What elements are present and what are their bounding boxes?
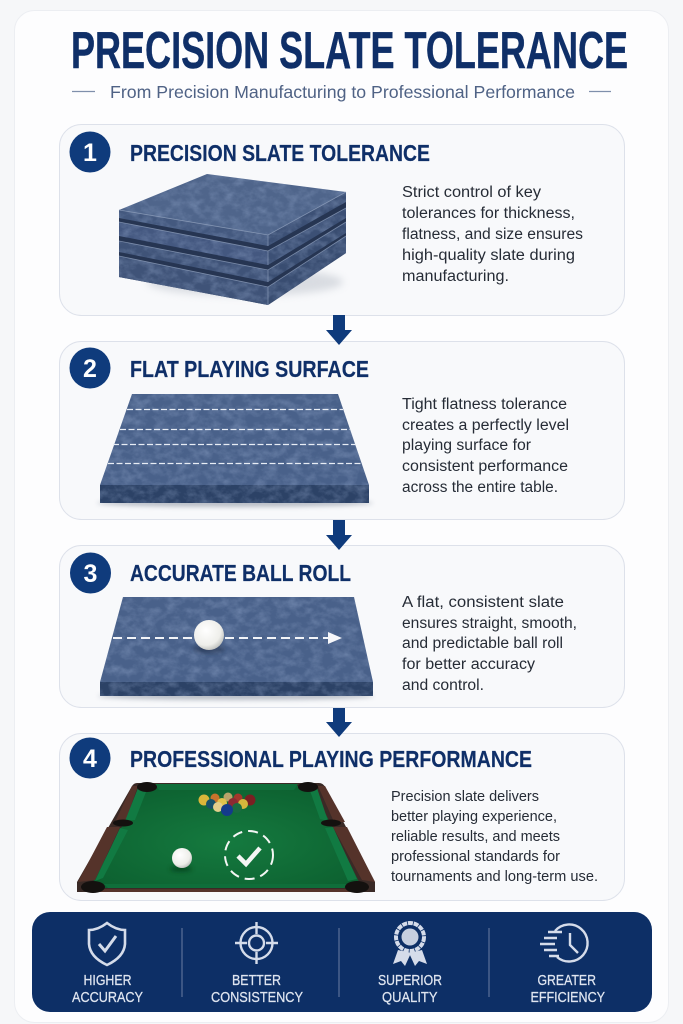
step 4 heading: PROFESSIONAL PLAYING PERFORMANCE	[130, 746, 532, 772]
step 1 illustration: stacked slate slabs	[119, 174, 346, 305]
panel: step 1	[60, 124, 624, 316]
step 4 description: better playing experience,	[391, 809, 557, 825]
step 4 description: professional standards for	[391, 849, 560, 865]
pockets	[81, 782, 369, 893]
step 1 description: flatness, and size ensures	[402, 226, 583, 243]
icon: target	[235, 922, 278, 964]
cue ball	[170, 866, 192, 872]
step 2 description: Tight flatness tolerance	[402, 396, 567, 413]
step 3 heading: ACCURATE BALL ROLL	[130, 560, 351, 586]
table frame	[77, 783, 375, 892]
benefit: superior quality: QUALITY	[382, 990, 438, 1006]
panel: step 4	[60, 734, 624, 900]
step 1 number badge	[70, 132, 110, 172]
step 4 description: reliable results, and meets	[391, 829, 560, 845]
step 3 number badge	[70, 552, 111, 594]
icon: award ribbon	[393, 923, 427, 966]
arrow: step 2 to 3	[326, 520, 352, 550]
step 4 number badge: 4	[83, 745, 97, 773]
rail wood	[78, 786, 375, 892]
step 2 heading: FLAT PLAYING SURFACE	[130, 356, 369, 382]
step 4 description: Precision slate delivers	[391, 789, 539, 805]
racked balls	[198, 792, 256, 816]
subtitle: From Precision Manufacturing to Professional Performance	[110, 82, 575, 102]
step 2 illustration: flat slate with level lines	[97, 394, 373, 507]
cushions	[104, 784, 348, 888]
step 1 number badge: 1	[83, 139, 97, 167]
arrow: step 3 to 4	[326, 708, 352, 737]
step 2 description: creates a perfectly level	[402, 417, 569, 434]
benefit: superior quality: SUPERIOR	[378, 973, 442, 989]
step 3 description	[402, 594, 577, 694]
benefit: higher accuracy	[72, 923, 143, 1006]
step 3 description: A flat, consistent slate	[402, 594, 564, 611]
benefit: better consistency	[211, 922, 303, 1006]
step 2 description: consistent performance	[402, 458, 568, 475]
step 1 heading: PRECISION SLATE TOLERANCE	[130, 140, 430, 166]
step 1 description: manufacturing.	[402, 268, 509, 285]
check mark in dashed circle	[225, 831, 273, 879]
step 3 description: for better accuracy	[402, 656, 535, 673]
step 2 description	[402, 396, 569, 496]
step 3 description: and predictable ball roll	[402, 635, 563, 652]
panel: step 3	[60, 546, 624, 708]
benefit: superior quality	[378, 923, 442, 1006]
step 2 number badge	[70, 348, 110, 388]
benefit: higher accuracy: HIGHER	[84, 973, 132, 989]
step 2 number badge: 2	[83, 355, 97, 383]
icon: fast clock	[540, 924, 588, 961]
step 2 description: playing surface for	[402, 437, 531, 454]
step 1 description: Strict control of key	[402, 184, 541, 201]
benefit: greater efficiency	[530, 924, 605, 1006]
step 1 description	[402, 184, 583, 285]
icon: shield	[89, 923, 125, 965]
arrow: step 1 to 2	[326, 315, 352, 345]
step 3 description: and control.	[402, 677, 484, 694]
benefit: better consistency: CONSISTENCY	[211, 990, 303, 1006]
benefit: greater efficiency: EFFICIENCY	[530, 990, 605, 1006]
step 3 number badge: 3	[84, 560, 97, 588]
step 4 number badge	[70, 738, 110, 778]
step 2 description: across the entire table.	[402, 479, 558, 496]
panel: benefits bar	[32, 912, 652, 1012]
step 4 description: tournaments and long-term use.	[391, 869, 598, 885]
panel: step 2	[60, 342, 624, 520]
benefit: greater efficiency: GREATER	[538, 973, 596, 989]
step 4 illustration: pool table	[77, 782, 375, 893]
step 3 description: ensures straight, smooth,	[402, 615, 577, 632]
step 4 description	[391, 789, 598, 885]
step 1 description: high-quality slate during	[402, 247, 575, 264]
step 3 illustration: slate with rolling ball	[98, 597, 374, 700]
felt	[90, 786, 362, 888]
benefit: better consistency: BETTER	[232, 973, 281, 989]
step 1 description: tolerances for thickness,	[402, 205, 575, 222]
benefit: higher accuracy: ACCURACY	[72, 990, 143, 1006]
